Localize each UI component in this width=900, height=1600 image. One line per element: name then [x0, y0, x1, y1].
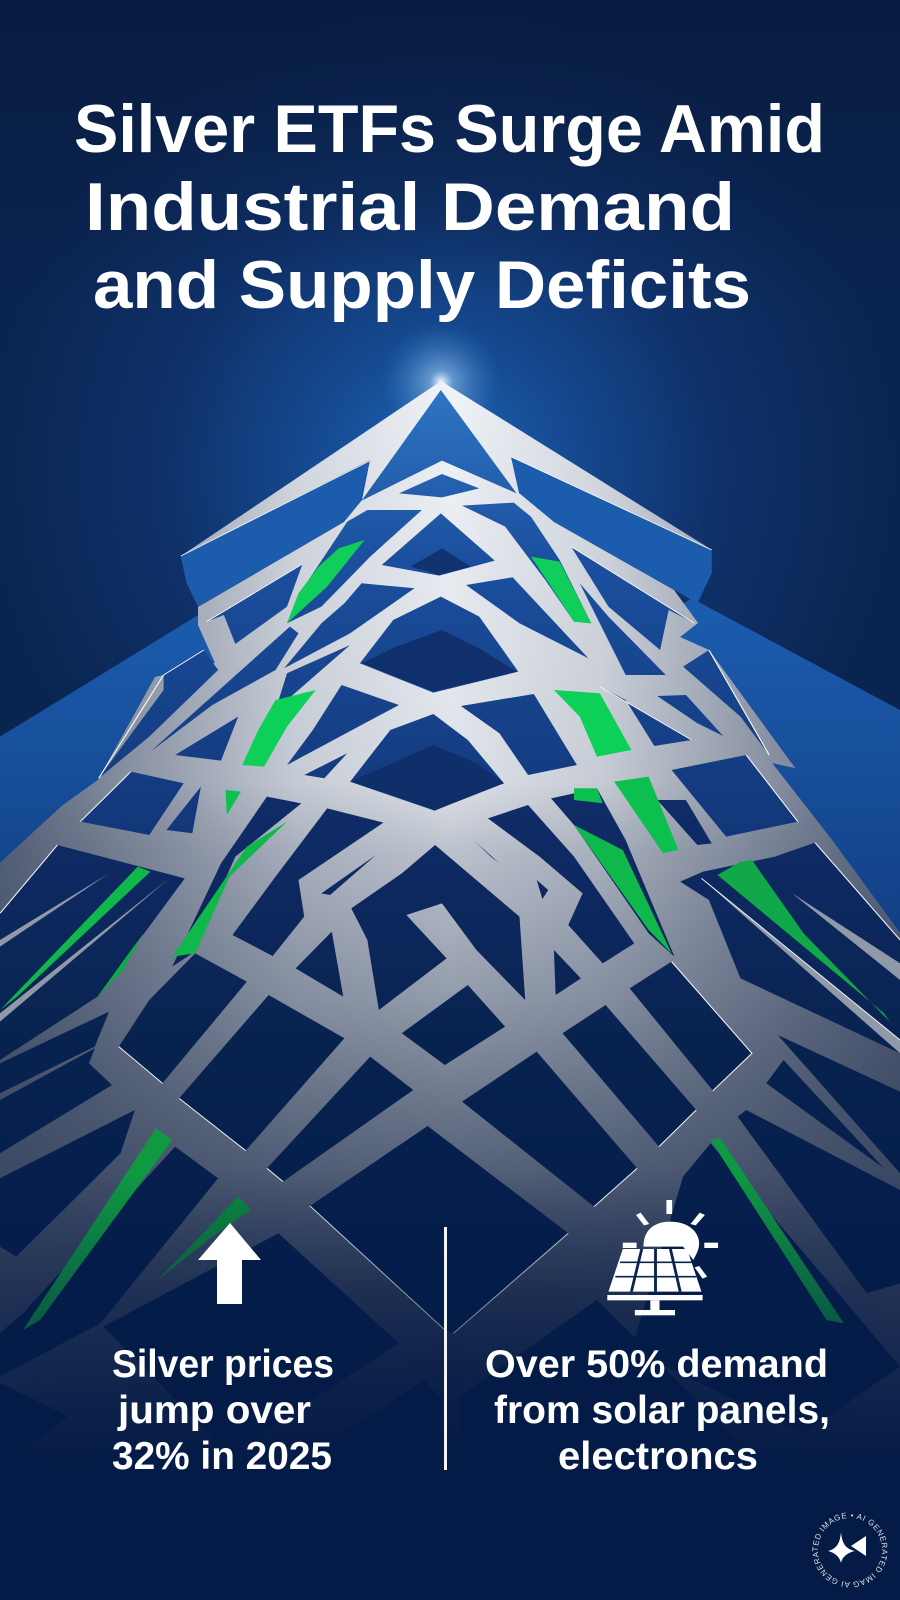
- blue back wings: [0, 457, 900, 973]
- left stat text: 32% in 2025: [112, 1435, 332, 1478]
- right stat text: Over 50% demand: [485, 1343, 828, 1386]
- lower lattice openings: [0, 788, 900, 1500]
- icon: up arrow: [198, 1223, 261, 1304]
- right stat text: from solar panels,: [494, 1389, 830, 1432]
- divider: [444, 1227, 447, 1470]
- badge: AI generated image: AI GENERATED IMAGE • AI GENERATED IMAGE •: [812, 1512, 888, 1588]
- apex glow: [381, 322, 501, 442]
- bright edge highlights: [0, 843, 900, 1333]
- title: [74, 91, 825, 323]
- title: Silver ETFs Surge Amid: [74, 91, 825, 167]
- left stat text: [112, 1343, 334, 1478]
- upper lattice openings: [80, 390, 798, 837]
- sun rays: [623, 1200, 718, 1279]
- title: and Supply Deficits: [93, 247, 751, 323]
- silver slats in side windows: [0, 873, 900, 1053]
- sun disc: [643, 1222, 699, 1260]
- green accents: [0, 540, 890, 1330]
- left stat text: Silver prices: [112, 1343, 334, 1386]
- left stat text: jump over: [117, 1389, 311, 1432]
- icon: solar panel with sun: [607, 1200, 718, 1315]
- silver lattice pyramid: [0, 381, 900, 1600]
- upper edge highlights: [80, 457, 798, 822]
- panel: [608, 1249, 701, 1292]
- panel grid: [615, 1249, 696, 1292]
- right stat text: electroncs: [558, 1435, 758, 1478]
- bottom dark fade: [0, 1170, 900, 1470]
- right stat text: [485, 1343, 830, 1478]
- stand: [607, 1295, 703, 1315]
- title: Industrial Demand: [85, 169, 735, 245]
